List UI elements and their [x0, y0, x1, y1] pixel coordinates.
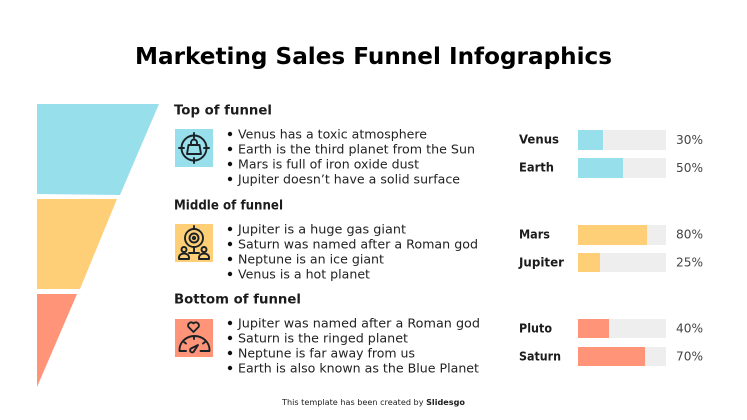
bar chart: Mars 80%: 80% [676, 228, 703, 242]
bar chart: Earth 50%: Earth [519, 160, 554, 174]
bar chart: Jupiter 25% [518, 253, 703, 272]
funnel: top segment [37, 104, 159, 195]
bar chart: Saturn 70% [519, 347, 703, 366]
bullet list: bottom of funnel: Earth is also known as the Blue Planet [238, 360, 479, 376]
footer credit: This template has been created by Slidesgo [281, 398, 465, 407]
bar chart: Mars 80%: Mars [519, 228, 550, 242]
bullet list: top of funnel: Jupiter doesn’t have a solid surface [237, 172, 460, 186]
bullet list: middle of funnel [228, 222, 478, 282]
heading: bottom of funnel: Bottom of funnel [174, 292, 301, 308]
bar chart: Venus 30%: 30% [676, 133, 703, 147]
bar chart: Jupiter 25%: 25% [676, 256, 703, 270]
bullet list: top of funnel: Mars is full of iron oxide dust [238, 156, 419, 172]
funnel: bottom segment [37, 294, 77, 387]
panel: top of funnel [174, 102, 475, 186]
bar chart: Pluto 40%: 40% [676, 322, 703, 336]
bullet list: middle of funnel: Jupiter is a huge gas giant [237, 222, 406, 236]
heading: middle of funnel: Middle of funnel [174, 198, 283, 214]
bullet list: top of funnel: Earth is the third planet from the Sun [238, 142, 475, 156]
bullet list: bottom of funnel: Saturn is the ringed planet [238, 330, 408, 346]
bar chart: Venus 30%: Venus [519, 132, 559, 146]
title: Marketing Sales Funnel Infographics [135, 42, 612, 70]
bar chart: Venus 30% [519, 130, 703, 150]
icon: target with shopping bag [175, 129, 213, 167]
bar chart: Mars 80% [519, 225, 703, 245]
bullet list: bottom of funnel: Neptune is far away from us [238, 346, 415, 360]
heading: top of funnel: Top of funnel [174, 102, 272, 118]
bullet list: middle of funnel: Neptune is an ice giant [238, 252, 384, 266]
bullet list: middle of funnel: Saturn was named after a Roman god [238, 236, 478, 252]
icon: heart and speedometer [175, 319, 213, 357]
bar chart: Pluto 40% [519, 319, 703, 338]
funnel: middle segment [37, 199, 117, 289]
bullet list: middle of funnel: Venus is a hot planet [238, 266, 370, 282]
bullet list: bottom of funnel: Jupiter was named after a Roman god [237, 316, 480, 330]
bar chart: Earth 50% [519, 158, 703, 178]
panel: bottom of funnel [174, 292, 480, 376]
bullet list: top of funnel: Venus has a toxic atmosphere [238, 126, 427, 142]
bar chart: Saturn 70%: Saturn [519, 350, 561, 364]
bar chart: Earth 50%: 50% [676, 161, 703, 175]
bullet list: top of funnel [228, 126, 475, 186]
bar chart: Saturn 70%: 70% [676, 350, 703, 364]
bullet list: bottom of funnel [228, 316, 480, 376]
bar chart: Pluto 40%: Pluto [519, 322, 552, 336]
funnel chart [37, 104, 159, 387]
panel: middle of funnel [174, 198, 478, 282]
icon: target with people [175, 224, 213, 262]
bar chart: Jupiter 25%: Jupiter [518, 256, 564, 270]
